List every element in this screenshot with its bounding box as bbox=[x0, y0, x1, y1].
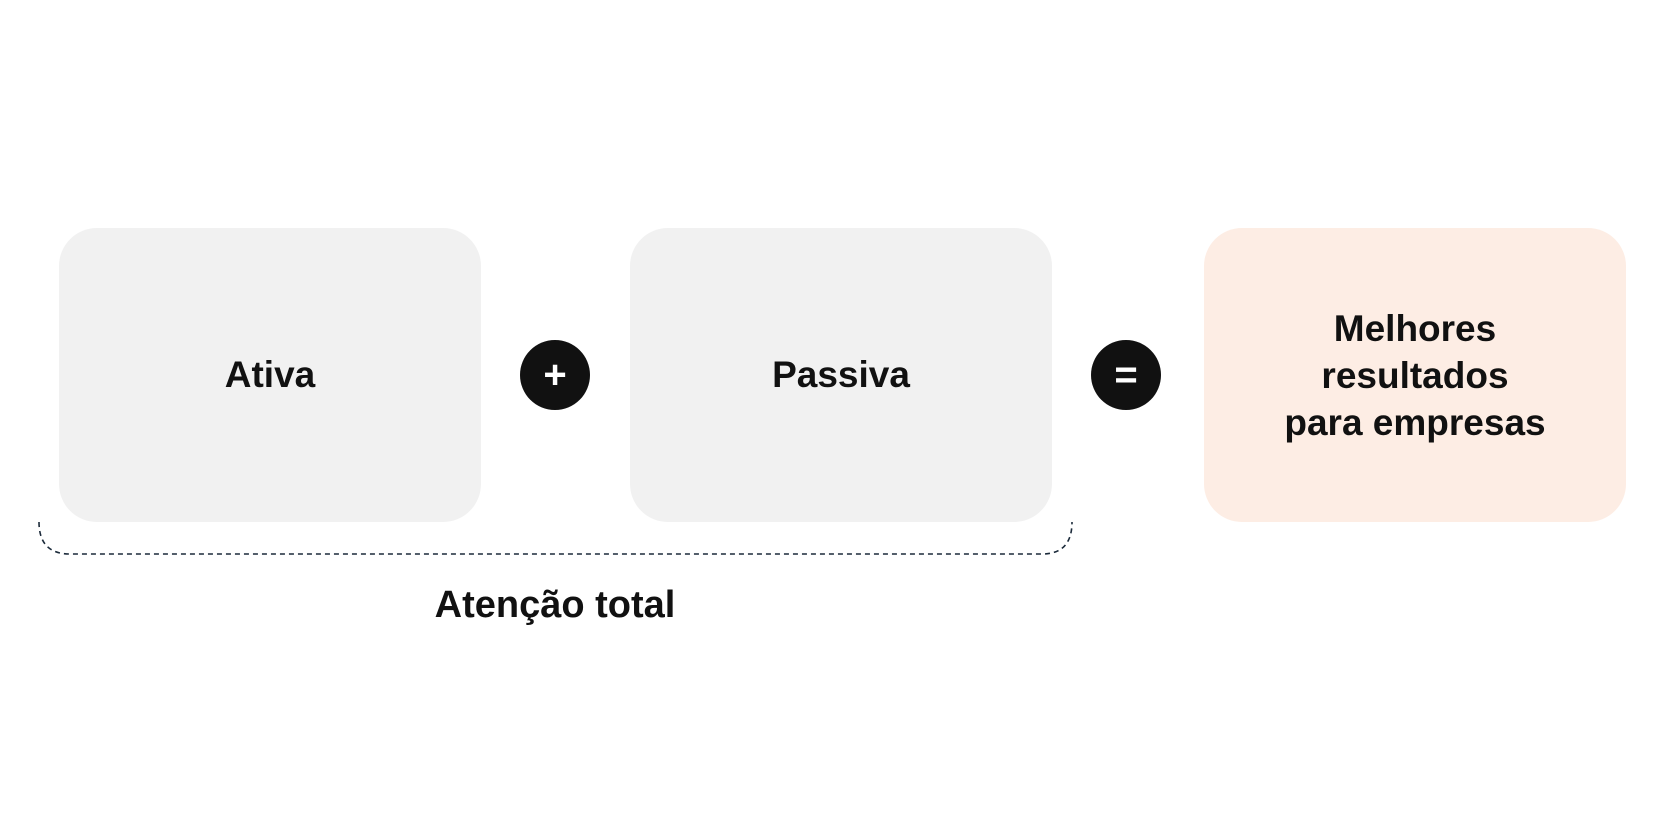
panel: Passiva bbox=[630, 228, 1052, 522]
panel: Passiva: Passiva bbox=[772, 354, 910, 395]
panel: Ativa bbox=[59, 228, 481, 522]
icon: equals bbox=[1091, 340, 1161, 410]
panel: result: Melhores bbox=[1334, 308, 1496, 348]
label: Atenção total: Atenção total bbox=[435, 584, 675, 626]
panel: result: resultados bbox=[1321, 354, 1509, 396]
panel: Ativa: Ativa bbox=[225, 354, 315, 395]
icon: plus bbox=[520, 340, 590, 410]
panel: result bbox=[1204, 228, 1626, 522]
panel: result: para empresas bbox=[1284, 402, 1546, 442]
icon: plus: + bbox=[543, 352, 567, 396]
icon: equals: = bbox=[1114, 352, 1138, 396]
